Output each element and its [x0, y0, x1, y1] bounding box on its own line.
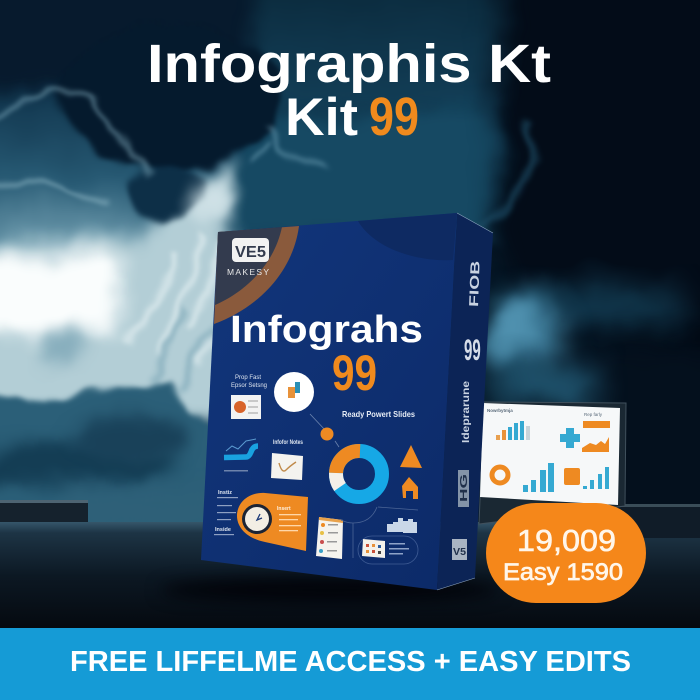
box logo: VE5	[235, 244, 266, 261]
side text top: FIOB	[466, 261, 483, 307]
laptop	[479, 402, 626, 524]
headline: 99	[369, 87, 419, 147]
graph card	[271, 453, 303, 480]
thumbnail card	[231, 395, 261, 419]
bottom banner	[0, 628, 700, 700]
side 99: 99	[464, 335, 481, 368]
side labels	[214, 490, 238, 535]
price badge: 19,009	[517, 523, 616, 558]
dark corner	[215, 227, 282, 305]
small caption: Epsor Setsng	[231, 383, 267, 389]
ground	[0, 522, 700, 630]
small caption: Prop Fast	[235, 375, 261, 381]
brown corner arc	[214, 226, 299, 324]
laptop charts: Rep farly	[584, 412, 603, 417]
headline: Kit	[285, 88, 358, 147]
logo circle	[274, 372, 314, 412]
clock callout	[237, 493, 308, 551]
side logo bottom	[452, 539, 467, 560]
side logo bottom: V5	[453, 547, 466, 558]
price badge: Easy 1590	[503, 559, 623, 586]
connector	[310, 414, 339, 447]
graph card heading: Infofor Notes	[273, 440, 304, 446]
house icon	[402, 477, 418, 499]
wave graphic	[224, 446, 258, 458]
donut chart	[336, 451, 382, 497]
checklist card	[316, 517, 343, 559]
triangle icon	[400, 445, 422, 468]
box logo: MAKESY	[227, 267, 269, 277]
box number: 99	[332, 345, 377, 401]
box front panel	[201, 213, 457, 590]
side logo top	[458, 470, 470, 507]
background: storm sky	[0, 0, 700, 540]
side text middle: Ideprarune	[461, 380, 472, 443]
small orange node	[320, 428, 334, 440]
laptop charts	[487, 408, 610, 492]
horizon barrier right	[610, 504, 700, 538]
top right dark arc	[358, 213, 457, 260]
box title: Infograhs	[230, 309, 423, 351]
side labels: Instiz	[218, 490, 232, 496]
calendar pill	[358, 536, 418, 564]
box shadow	[160, 577, 500, 603]
laptop screen	[480, 403, 620, 505]
clock callout: Insert	[277, 506, 291, 512]
price badge	[486, 503, 646, 603]
slogan: Ready Powert Slides	[342, 409, 415, 419]
wave line	[226, 439, 256, 451]
headline: Infographis Kt	[147, 34, 551, 94]
laptop charts: Nowrbytmja	[487, 408, 513, 413]
headline	[147, 34, 551, 147]
side labels: Inside	[215, 527, 231, 533]
box bottom highlight	[437, 213, 493, 590]
product box	[201, 213, 493, 590]
graph caption	[224, 470, 248, 472]
connector arc	[341, 507, 418, 558]
bar icon	[387, 518, 417, 533]
laptop frame	[479, 402, 626, 524]
horizon barrier left	[0, 500, 88, 522]
box side panel	[437, 213, 493, 590]
bottom banner: FREE LIFFELME ACCESS + EASY EDITS	[70, 646, 631, 678]
box logo	[227, 238, 269, 277]
side logo top: HG	[459, 474, 470, 502]
